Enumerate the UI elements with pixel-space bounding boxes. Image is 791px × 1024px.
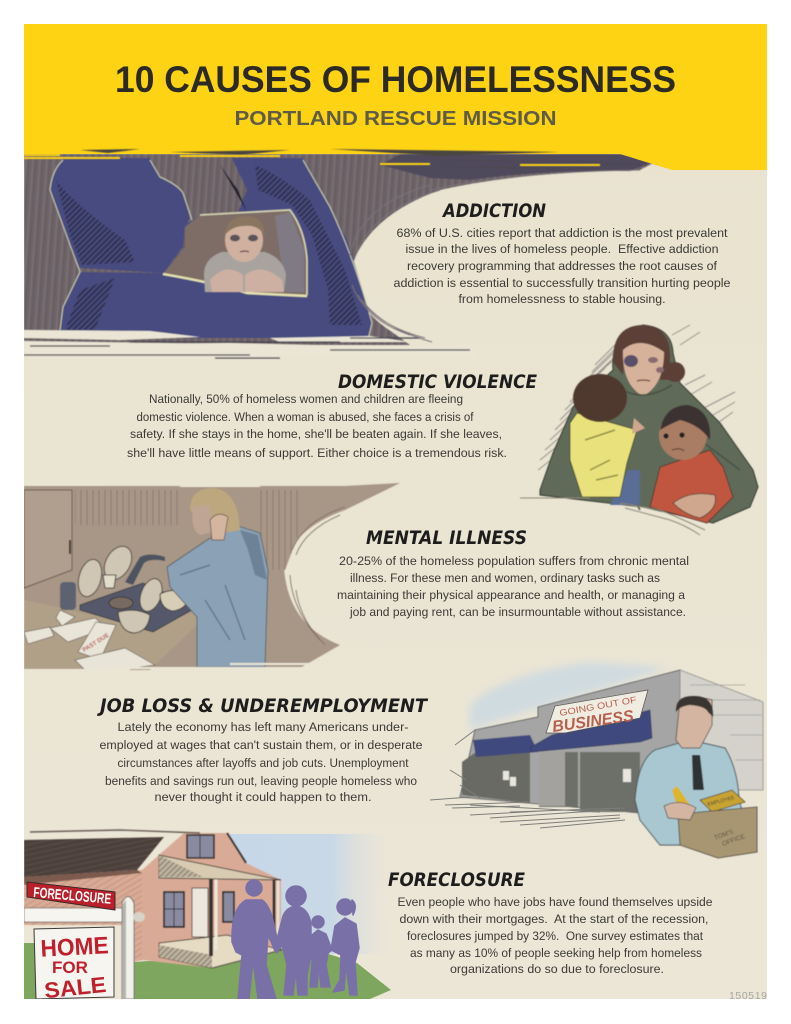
body: addiction: addiction is essential to successfully transition hurting people	[394, 276, 731, 290]
body: mental illness	[337, 554, 689, 619]
body: domestic violence: she'll have little means of support. Either choice is a tremendous risk.	[127, 446, 507, 460]
body: mental illness: illness. For these men and women, ordinary tasks such as	[350, 571, 660, 585]
home for sale sign: FOR	[52, 958, 88, 977]
body: foreclosure: foreclosures jumped by 32%. One survey estimates that	[407, 929, 704, 943]
home for sale sign	[34, 927, 114, 1003]
body: mental illness: job and paying rent, can be insurmountable without assistance.	[349, 605, 686, 619]
body: job loss	[100, 720, 423, 804]
man with box	[635, 696, 757, 858]
body: addiction: issue in the lives of homeless people. Effective addiction	[406, 242, 719, 256]
illustration: job loss	[430, 662, 763, 858]
header ragged stroke	[24, 149, 660, 170]
heading: domestic violence: DOMESTIC VIOLENCE	[338, 371, 537, 393]
going out of business banner	[546, 690, 648, 736]
foreclosure rider sign	[27, 882, 115, 910]
daughter	[331, 899, 359, 995]
sign post	[24, 896, 145, 999]
body: foreclosure	[398, 895, 713, 976]
body: foreclosure: Even people who have jobs have found themselves upside	[398, 895, 713, 909]
mother in green hood	[540, 325, 758, 523]
ground streaks	[430, 730, 625, 828]
box: TOM'S	[713, 828, 735, 842]
house	[24, 830, 281, 968]
body: mental illness: maintaining their physical appearance and health, or managing a	[337, 588, 685, 602]
body: job loss: never thought it could happen to them.	[154, 790, 372, 804]
man with box: EMPLOYEE	[707, 795, 736, 808]
box: OFFICE	[721, 833, 747, 848]
title: 10 CAUSES OF HOMELESSNESS	[115, 59, 676, 100]
body: foreclosure: organizations do so due to foreclosure.	[450, 962, 664, 976]
illustration: addiction	[24, 154, 672, 358]
body: foreclosure: down with their mortgages. At the start of the recession,	[400, 912, 708, 926]
illustration: mental illness	[24, 483, 400, 670]
scattered papers: PAST DUE	[82, 633, 110, 654]
body: addiction: 68% of U.S. cities report that addiction is the most prevalent	[396, 226, 728, 240]
child in doorway	[163, 210, 307, 296]
section: domestic violence text	[127, 371, 537, 460]
body: job loss: Lately the economy has left many Americans under-	[118, 720, 408, 734]
subtitle: PORTLAND RESCUE MISSION	[234, 108, 556, 130]
body: job loss: circumstances after layoffs and job cuts. Unemployment	[118, 756, 409, 770]
box	[678, 807, 757, 858]
sky	[470, 662, 670, 730]
heading: addiction: ADDICTION	[441, 200, 546, 222]
counter	[24, 600, 197, 670]
body: foreclosure: as many as 10% of people seeking help from homeless	[410, 946, 702, 960]
foreclosure rider sign: FORECLOSURE	[33, 885, 112, 908]
sink and dishes	[60, 541, 197, 633]
cream brush strokes	[24, 330, 480, 358]
body: addiction: recovery programming that addresses the root causes of	[407, 259, 718, 273]
hooded figure	[50, 158, 372, 340]
going out of business banner: BUSINESS	[551, 708, 635, 736]
body: job loss: benefits and savings run out, leaving people homeless who	[105, 774, 417, 788]
sky	[230, 834, 367, 954]
body: mental illness: 20-25% of the homeless population suffers from chronic mental	[339, 554, 689, 568]
illustration: domestic violence	[520, 325, 758, 535]
body: job loss: employed at wages that can't sustain them, or in desperate	[100, 738, 423, 752]
document code: 150519	[729, 990, 767, 1002]
mother	[275, 886, 311, 995]
illustration: foreclosure	[24, 830, 400, 1003]
grass	[24, 943, 391, 999]
father	[232, 880, 279, 999]
body: domestic violence	[127, 392, 507, 460]
person in hoodie	[167, 488, 268, 667]
girl in yellow	[570, 374, 645, 505]
scattered papers	[24, 610, 155, 670]
family silhouettes	[232, 880, 359, 999]
yellow header band	[24, 24, 767, 170]
body: domestic violence: safety. If she stays in the home, she'll be beaten again. If she leaves,	[130, 427, 502, 441]
son	[310, 916, 332, 987]
heading: job loss: JOB LOSS & UNDEREMPLOYMENT	[96, 695, 429, 717]
heading: mental illness: MENTAL ILLNESS	[366, 527, 527, 549]
section: foreclosure text	[388, 869, 713, 976]
section: addiction text	[394, 200, 731, 306]
section: mental illness text	[337, 527, 689, 619]
home for sale sign: HOME	[40, 932, 109, 963]
heading: foreclosure: FORECLOSURE	[388, 869, 525, 891]
body: addiction	[394, 226, 731, 306]
section: job loss text	[96, 695, 429, 804]
home for sale sign: SALE	[43, 972, 107, 1003]
body: addiction: from homelessness to stable housing.	[458, 292, 666, 306]
going out of business banner: GOING OUT OF	[559, 694, 638, 718]
boy in orange jacket	[650, 405, 733, 523]
body: domestic violence: Nationally, 50% of homeless women and children are fleeing	[149, 392, 463, 406]
building	[460, 670, 763, 813]
body: domestic violence: domestic violence. When a woman is abused, she faces a crisis of	[136, 410, 474, 424]
